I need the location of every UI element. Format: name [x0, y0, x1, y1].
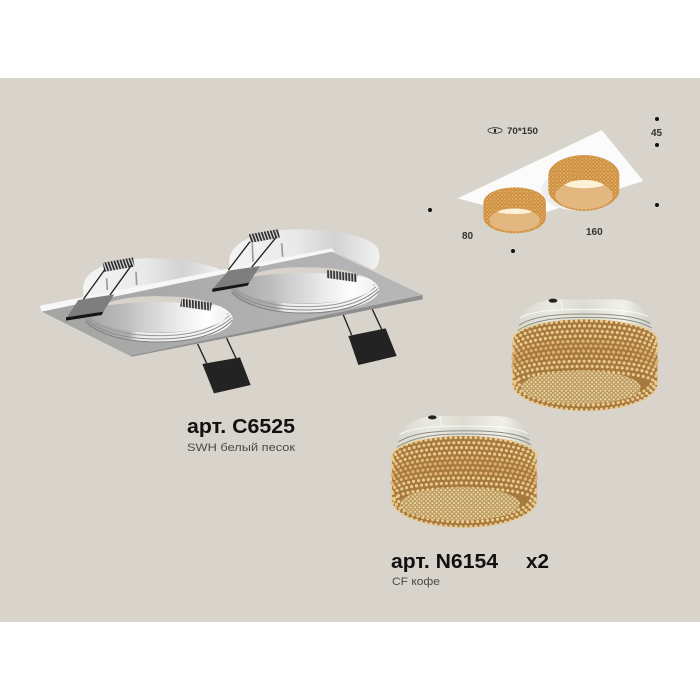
heading: frame article: арт. C6525: [187, 415, 295, 438]
hanging terminal left: [198, 338, 251, 393]
dimension markers: [428, 117, 659, 253]
spring arms and clips: [66, 237, 277, 321]
back tube left: [83, 258, 224, 297]
left ring: [483, 187, 546, 233]
cut-out size label: 70*150: [507, 126, 538, 137]
height label: 45: [651, 128, 663, 139]
quantity: x2: [526, 550, 549, 573]
mounting plate: [40, 248, 423, 357]
length label: 160: [586, 227, 603, 238]
heading: ring article: арт. N6154: [391, 550, 499, 573]
right ring: [542, 155, 619, 211]
left opening: [85, 296, 233, 342]
caption: ring colour: CF кофе: [392, 576, 440, 588]
width label: 80: [462, 231, 474, 242]
product: upper crystal ring: [513, 299, 657, 411]
springs on back tubes: [103, 229, 283, 290]
back tube right: [229, 229, 379, 271]
icon: cut-out size: [488, 128, 502, 133]
background panel: [0, 78, 700, 622]
hanging terminal right: [343, 309, 397, 365]
product: double recessed frame C6525: [40, 229, 423, 393]
caption: frame colour: SWH белый песок: [187, 442, 295, 454]
white plate: [458, 130, 643, 217]
dimension diagram: assembled luminaire: [458, 130, 643, 233]
product: lower crystal ring: [392, 415, 537, 527]
right opening: [231, 267, 379, 313]
